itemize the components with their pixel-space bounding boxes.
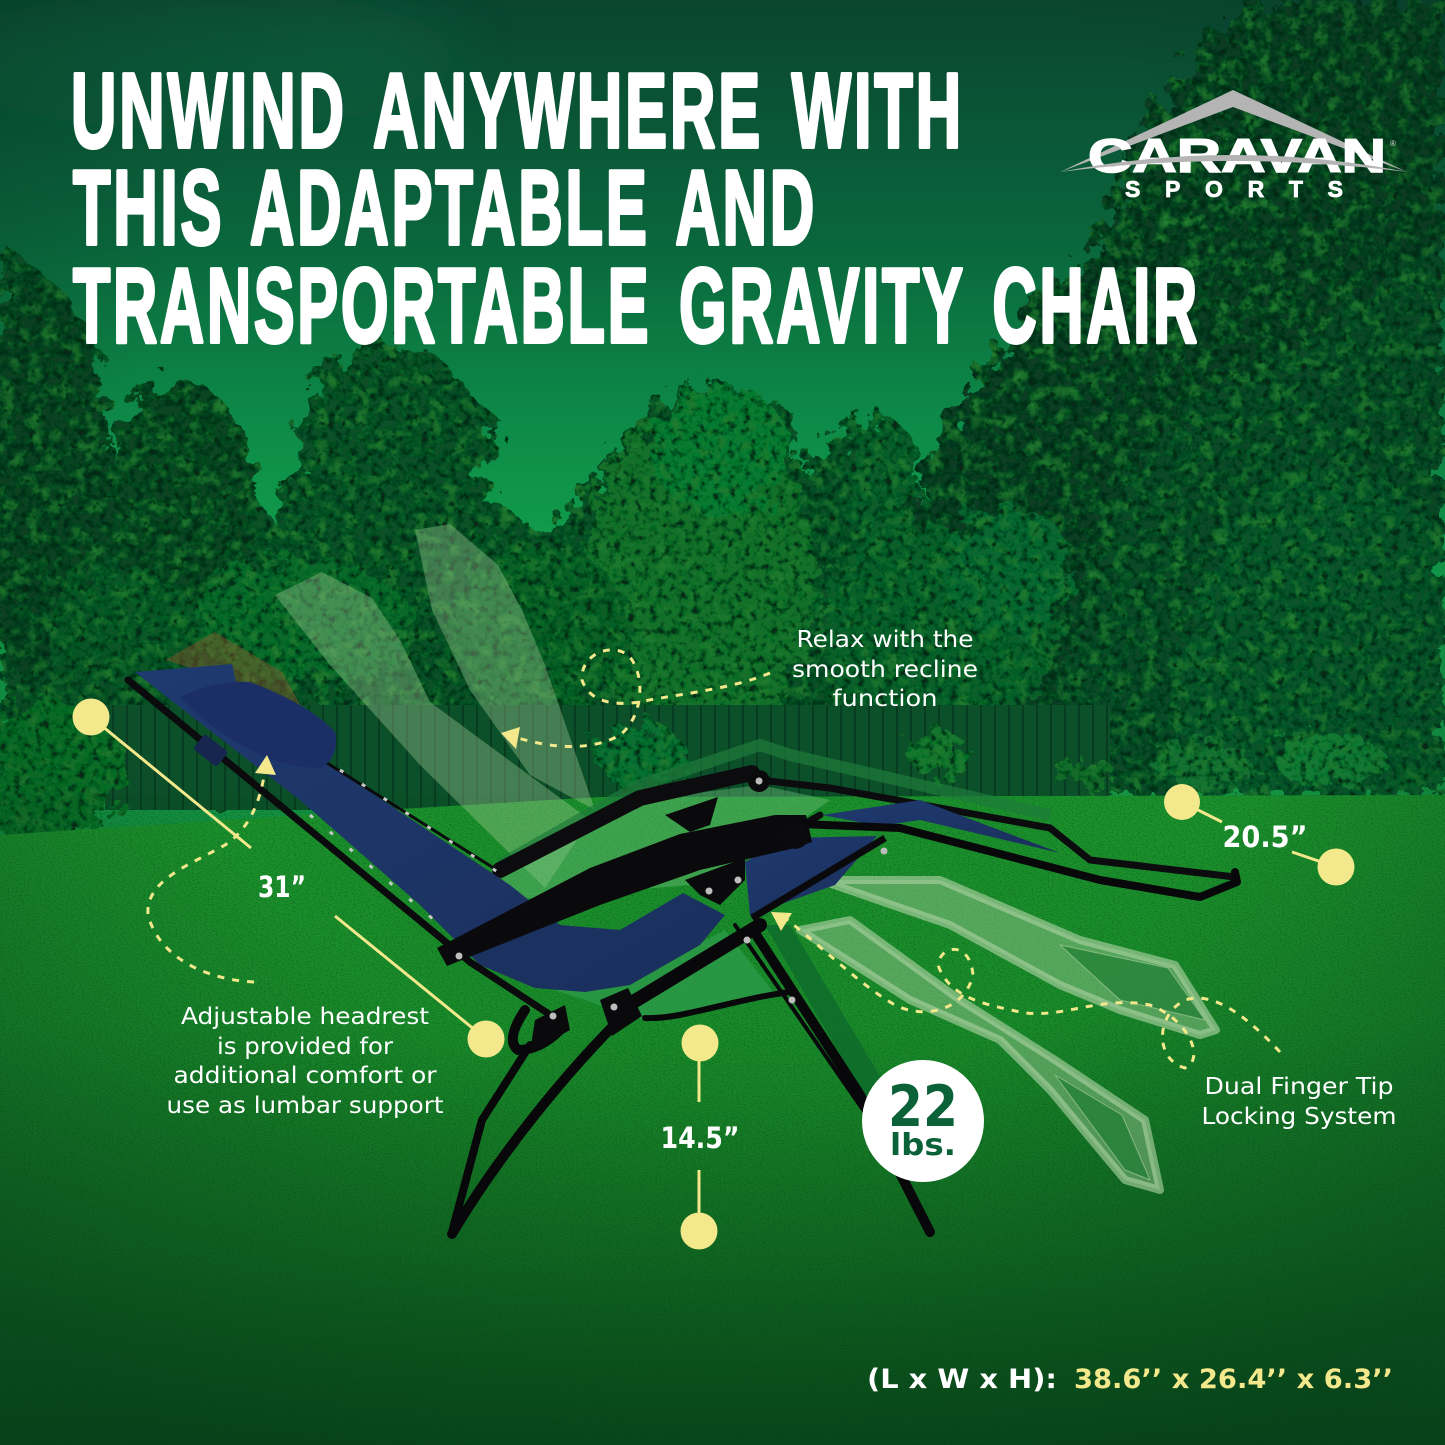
dimension: 14.5 inch seat height (660, 1024, 740, 1250)
title: THIS ADAPTABLE AND (73, 149, 817, 267)
callout: recline text: function (832, 686, 938, 712)
callout: locking system text (1202, 1074, 1396, 1130)
callout: headrest text: use as lumbar support (166, 1093, 444, 1119)
logo: Caravan Sports: SPORTS (1125, 176, 1343, 202)
callout: headrest text (166, 1004, 444, 1119)
dimension: 20.5 inch seat width: 20.5” (1222, 820, 1308, 854)
badge: 22 lbs weight (862, 1060, 984, 1182)
title (71, 52, 1200, 365)
badge: 22 lbs weight: 22 (888, 1074, 958, 1140)
dimension: 31 inch back length (72, 698, 504, 1058)
callout: recline arrow (501, 650, 770, 749)
ghost chair positions: reclining back (165, 524, 595, 888)
callout: headrest text: additional comfort or (174, 1063, 437, 1089)
folded dimensions: (L x W x H): (867, 1364, 1057, 1395)
headrest pillow (180, 682, 336, 768)
callout: headrest text: is provided for (217, 1034, 394, 1060)
callout: recline text: Relax with the (796, 627, 974, 653)
callout: recline text (792, 627, 978, 712)
ghost chair positions: lowered footrest (800, 880, 1216, 1190)
callout: locking system arrow (771, 912, 1280, 1068)
callout: recline text: smooth recline (792, 657, 978, 683)
logo: Caravan Sports: CARAVAN (1088, 129, 1386, 182)
logo: Caravan Sports (1060, 90, 1407, 202)
badge: 22 lbs weight: lbs. (890, 1128, 956, 1163)
folded dimensions (867, 1364, 1393, 1395)
dimension: 14.5 inch seat height: 14.5” (660, 1121, 740, 1155)
chair (128, 664, 1237, 1234)
garden fence (105, 705, 1110, 810)
dimension: 31 inch back length: 31” (258, 870, 306, 904)
callout: headrest arrow (148, 755, 276, 982)
near armrest (437, 815, 812, 966)
callout: locking system text: Dual Finger Tip (1204, 1074, 1394, 1100)
callout: locking system text: Locking System (1202, 1104, 1396, 1130)
callout: headrest text: Adjustable headrest (181, 1004, 429, 1030)
ghost armrest motion blur (500, 745, 1050, 865)
fabric lacing (310, 770, 510, 925)
dimension: 20.5 inch seat width (1164, 784, 1354, 886)
folded dimensions: 38.6’’ x 26.4’’ x 6.3’’ (1074, 1364, 1393, 1395)
logo: Caravan Sports: ® (1390, 139, 1396, 148)
ghost seat under frame (500, 785, 900, 1110)
